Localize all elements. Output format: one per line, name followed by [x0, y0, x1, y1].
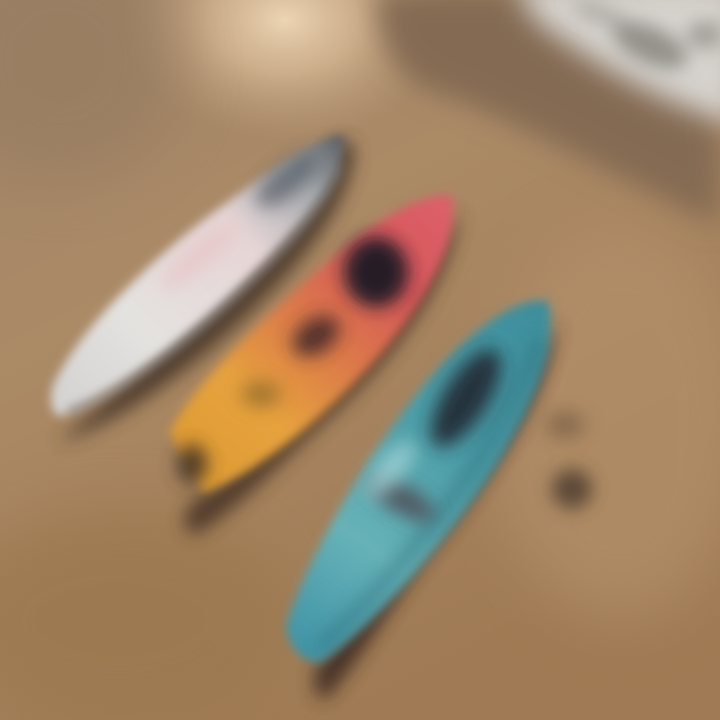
- red board body: [170, 195, 453, 492]
- pad: middle dark: [285, 307, 347, 365]
- fin shadow: [177, 444, 207, 484]
- teal board band: [362, 468, 442, 530]
- teal board dark rail: [318, 340, 540, 650]
- ocean foam: [520, 0, 720, 125]
- teal board dark deck pad: [418, 339, 514, 457]
- white board pink tint: [153, 213, 247, 297]
- white board nose detail: [248, 144, 326, 216]
- footprints in the sand: [545, 411, 592, 509]
- surfboard: teal: [286, 300, 558, 700]
- surfboard: white: [51, 135, 354, 442]
- white board body: [51, 135, 344, 416]
- teal board light area: [357, 434, 423, 506]
- logo mark: [241, 381, 281, 407]
- foam shadows: [569, 0, 720, 78]
- red board shadow: [184, 210, 460, 535]
- surfboard: red and yellow: [170, 195, 460, 535]
- white board shadow: [58, 140, 354, 442]
- teal board shadow: [314, 320, 558, 700]
- pad: upper dark: [344, 237, 408, 307]
- teal board body: [286, 300, 551, 662]
- white board underside rail: [68, 165, 340, 412]
- wet sand shoreline: [378, 0, 720, 225]
